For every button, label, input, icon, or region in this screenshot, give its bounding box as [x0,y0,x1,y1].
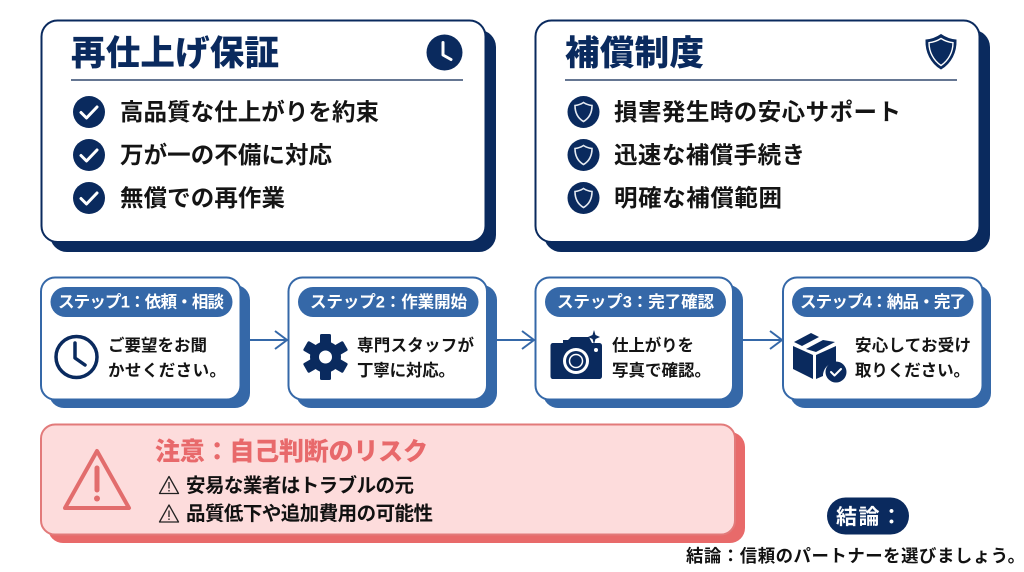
text: ステップ2本文: 丁寧に対応。 [357,361,455,380]
list item: 高品質な仕上がりを約束: 高品質な仕上がりを約束 [120,98,379,125]
icon: shield badge [926,34,956,69]
list item: 無償での再作業: 無償での再作業 [120,185,285,211]
label: ステップ4: ステップ4：納品・完了 [800,292,966,312]
panel: 注意 [41,424,745,543]
heading: 再仕上げ保証: 再仕上げ保証 [71,35,279,73]
icon: clock [56,336,97,378]
text: ステップ2本文: 専門スタッフが [357,335,474,355]
list item: 明確な補償範囲 [568,182,782,214]
label: ステップ4 [792,287,974,317]
list item: 無償での再作業 [73,182,285,214]
badge: 結論 [827,498,909,534]
list item: 明確な補償範囲: 明確な補償範囲 [614,185,782,211]
label: ステップ1 [50,287,232,317]
panel: 再仕上げ保証 [42,20,496,252]
arrow: 1 to 2 [243,331,287,349]
text: ステップ1本文: ご要望をお聞 [108,335,207,355]
heading: 注意: 注意：自己判断のリスク [155,438,428,466]
badge: 結論: 結論： [836,506,902,529]
panel: 補償制度 [536,20,990,252]
list item: 迅速な補償手続き: 迅速な補償手続き [614,142,805,168]
text: ステップ1本文: かせください。 [108,361,226,380]
text: ステップ3本文: 写真で確認。 [612,361,711,380]
list item: 万が一の不備に対応: 万が一の不備に対応 [120,141,332,168]
text: ステップ3本文: 仕上がりを [612,335,694,355]
arrow: 2 to 3 [490,331,534,349]
panel: ステップ3 [536,278,743,408]
icon: package with check [793,333,846,382]
text: ステップ4本文: 取りください。 [855,361,970,380]
icon: warning triangle [65,451,129,508]
icon: camera [550,330,602,379]
icon: clock badge [426,34,462,70]
text: ステップ1本文 [108,335,226,380]
panel: ステップ4 [783,278,991,408]
text: ステップ4本文: 安心してお受け [855,336,971,355]
icon: gear [303,334,348,380]
list item: 高品質な仕上がりを約束 [73,96,379,128]
label: ステップ3 [545,287,726,317]
warning item 1: 安易な業者はトラブルの元 [186,474,414,497]
heading: 補償制度: 補償制度 [565,35,704,73]
panel: ステップ1 [41,278,250,408]
label: ステップ3: ステップ3：完了確認 [557,292,714,312]
list item: 万が一の不備に対応 [73,139,332,171]
text: ステップ2本文 [357,335,474,380]
list item: 損害発生時の安心サポート: 損害発生時の安心サポート [614,99,901,125]
list item: 損害発生時の安心サポート [568,96,901,128]
list item: 迅速な補償手続き [568,139,805,171]
label: ステップ1: ステップ1：依頼・相談 [58,292,224,312]
text: ステップ3本文 [612,335,711,380]
icon: shield inner outline [929,38,953,66]
label: ステップ2: ステップ2：作業開始 [310,292,468,312]
text: ステップ4本文 [855,336,971,380]
conclusion text: 結論：信頼のパートナーを選びましょう。 [686,546,1024,566]
arrow: 3 to 4 [737,331,782,349]
warning item 2: 品質低下や追加費用の可能性 [186,503,433,525]
label: ステップ2 [298,287,478,317]
panel: ステップ2 [288,278,497,408]
